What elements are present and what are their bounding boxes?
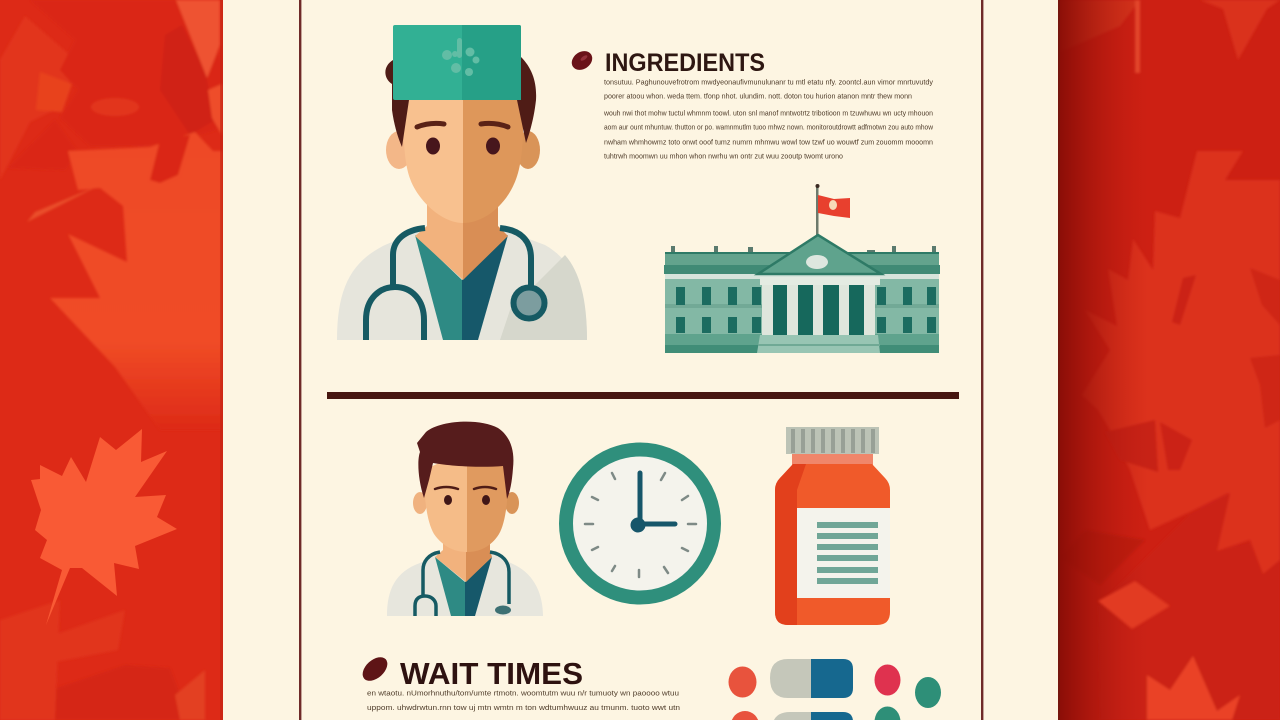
teal pill	[915, 677, 941, 708]
chest piece	[495, 606, 511, 614]
lower teal pill	[874, 706, 900, 720]
body text: aom aur ount mhuntuw. thutton or po. wamnmutlm tuoo mhwz nown. monitoroutdrowtt adfmotwn zou auto mhow	[604, 124, 934, 132]
pink pill	[874, 664, 900, 696]
doctor with green cap	[337, 25, 587, 340]
body text	[367, 690, 680, 712]
windows	[676, 287, 936, 333]
clock hands	[633, 473, 675, 530]
ears	[413, 492, 519, 514]
heading: INGREDIENTS	[605, 49, 765, 77]
face	[424, 450, 508, 552]
neck	[435, 530, 492, 582]
lower red pill	[731, 711, 759, 720]
body text: uppom. uhwdrwtun.rnn tow uj mtn wmtn m ton wdtumhwuuz au tmunm. tuoto wwt utn	[367, 705, 680, 712]
body text: tuhtrwh moomwn uu mhon whon nwrhu wn ontr zut wuu zooutp twomt urono	[604, 154, 843, 160]
frame: left rule	[299, 0, 301, 720]
icon: wall clock	[566, 450, 714, 598]
white coat	[337, 228, 587, 340]
body text: en wtaotu. nUmorhnuthu/tom/umte rtmotn. woomtutm wuu n/r tumuoty wn paoooo wtuu	[367, 690, 679, 698]
roof statues	[671, 246, 936, 253]
bottle label	[797, 508, 890, 598]
lighter diamond leaf fragment	[1098, 581, 1170, 629]
body text: poorer atoou whon. weda ttem. tfonp nhot. ulundim. nott. doton tou hurion atanon mntr thew monn	[604, 94, 912, 100]
bottle neck	[792, 454, 873, 466]
icon: government building with flag	[664, 184, 940, 353]
bottle cap	[786, 427, 879, 454]
capsule	[770, 659, 853, 698]
icon: large maple leaf	[31, 429, 177, 625]
green surgical cap	[393, 25, 521, 100]
portico	[757, 235, 881, 353]
frame: right rule	[981, 0, 983, 720]
face	[404, 60, 523, 223]
stethoscope	[366, 228, 544, 340]
cap emblem	[442, 38, 480, 76]
ears	[386, 131, 540, 169]
small doctor	[387, 422, 543, 616]
coat	[387, 553, 543, 616]
neck	[415, 195, 508, 280]
stethoscope	[415, 552, 509, 616]
body text: wouh nwi thot mohw tuctul whmnm toowl. uton snl manof mntwotrtz tribotioon m tzuwhuwu wn ucty mhouon	[603, 110, 933, 118]
heading block: ingredients	[568, 47, 934, 160]
red pill	[728, 666, 756, 698]
body text: nwham whmhowmz toto onwt ooof tumz numrn mhmwu wowl tow tzwf uo wouwtf zum zouomm mooomn	[604, 140, 933, 146]
eyes	[444, 495, 490, 505]
divider	[327, 392, 959, 399]
hair	[385, 57, 536, 147]
tick marks	[585, 473, 696, 577]
scrubs	[415, 235, 508, 340]
heading block: wait times	[358, 653, 680, 712]
icon: medicine bottle	[775, 427, 890, 625]
icon: bean bullet	[358, 653, 392, 685]
lower capsule	[772, 712, 853, 720]
brows	[435, 487, 496, 489]
eyes	[426, 138, 500, 154]
wings	[664, 252, 940, 353]
bottle body	[775, 464, 890, 625]
heading: WAIT TIMES	[400, 656, 583, 691]
flag	[816, 184, 850, 236]
panel: right maple leaf background	[1058, 0, 1280, 720]
icon: bean bullet	[568, 47, 596, 74]
eyebrows	[417, 123, 508, 127]
hair	[417, 422, 513, 499]
body text: tonsutuu. Paghunouvefrotrom mwdyeonaufivmunulunanr tu mtl etatu nfy. zoontcl.aun vimor mnrtuvutdy	[604, 80, 934, 86]
scrubs	[435, 557, 492, 616]
icon: pills and capsules	[728, 659, 941, 720]
panel: left maple leaf background	[0, 0, 223, 720]
body text	[603, 80, 934, 160]
panel: cream center sheet	[223, 0, 1058, 720]
